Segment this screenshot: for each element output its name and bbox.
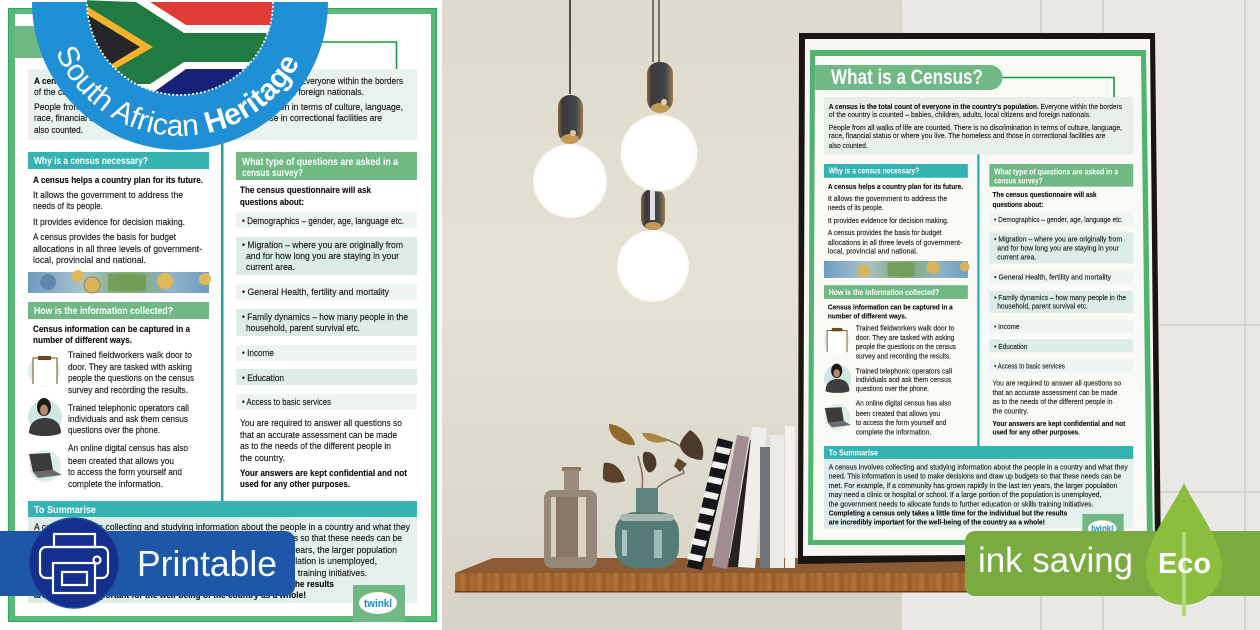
operators text: Trained telephonic operators call [68, 403, 189, 414]
why section: A census provides the basis for budget [33, 232, 176, 243]
questions intro: questions about: [240, 197, 304, 208]
why section: A census helps a country plan for its future. [828, 182, 963, 191]
intro panel: of the country is counted – babies, children, adults, local citizens and foreign nationals. [34, 87, 364, 98]
striped book [687, 438, 733, 570]
to summarise section: the government needs to allocate funds to further education or skills training initiatives. [34, 568, 367, 579]
to summarise section: To Summarise [34, 505, 96, 516]
icon: printer [40, 534, 108, 593]
banner bar [0, 531, 295, 596]
grey book [760, 447, 770, 568]
how section: number of different ways. [33, 335, 132, 346]
online text: been created that allows you [68, 456, 174, 467]
fieldworkers text: survey and recording the results. [68, 385, 188, 396]
South African Heritage badge [32, 0, 328, 150]
why section: allocations in all three levels of government- [828, 238, 963, 247]
why section: needs of its people. [828, 203, 884, 212]
why section [28, 152, 209, 266]
bullet list [989, 212, 1133, 372]
questions intro: questions about: [993, 200, 1043, 209]
questions heading [236, 152, 417, 180]
brown glass bottle [544, 467, 597, 568]
fieldworkers text: survey and recording the results. [856, 352, 951, 361]
wooden shelf [455, 558, 1000, 601]
questions heading: census survey? [242, 168, 303, 179]
intro panel: A census is the total count of everyone in the country's population. Everyone within the borders [34, 76, 403, 87]
bullet list: current area. [997, 252, 1036, 261]
to summarise section: To Summarise [829, 449, 878, 458]
fieldworkers text: people the questions on the census [856, 342, 956, 351]
to summarise section: met. For example, if a community has grown rapidly in the last ten years, the larger population [34, 545, 397, 556]
intro panel: race, financial status or where you live. The homeless and those in correctional facilities are [829, 131, 1105, 140]
red band [150, 2, 280, 25]
fieldworkers text: Trained fieldworkers walk door to [856, 323, 954, 332]
bullet list: • Migration – where you are originally from [994, 235, 1122, 244]
required answers text [992, 378, 1126, 437]
twinkl logo [1082, 514, 1124, 544]
to summarise section [824, 446, 1133, 528]
bullet list: • General Health, fertility and mortality [994, 273, 1111, 282]
eco text: Eco [1158, 548, 1211, 580]
bullet list: • Income [994, 322, 1020, 331]
questions heading: What type of questions are asked in a [242, 157, 398, 168]
framed poster on wall [798, 33, 1161, 564]
why section: It allows the government to address the [33, 190, 183, 201]
required answers text: You are required to answer all questions so [993, 378, 1121, 387]
white tiles [900, 0, 1260, 630]
title connector line [300, 42, 396, 69]
title text: What is a Census? [831, 65, 983, 89]
white mat [803, 39, 1155, 556]
money image band [28, 270, 211, 293]
intro panel: race, financial status or where you live. The homeless and those in correctional facilities are [34, 113, 382, 124]
column divider [977, 154, 979, 446]
column divider [221, 140, 224, 501]
bullet list: household, parent survival etc. [246, 323, 360, 334]
bullet list: household, parent survival etc. [997, 302, 1088, 311]
bullet list: • Access to basic services [242, 397, 331, 408]
fieldworkers text: door. They are tasked with asking [68, 362, 192, 373]
poster content [824, 97, 1133, 544]
twinkl logo: twinkl [1091, 524, 1113, 534]
how section: How is the information collected? [34, 306, 173, 317]
icon: telephone operator [28, 398, 62, 436]
why section: A census provides the basis for budget [828, 228, 942, 237]
twinkl logo: twinkl [364, 598, 392, 610]
wall [442, 0, 900, 630]
poster paper [813, 56, 1147, 540]
online text: complete the information. [68, 479, 163, 490]
fieldworkers text: door. They are tasked with asking [856, 333, 954, 342]
stack of books [687, 426, 795, 570]
operators text: questions over the phone. [68, 425, 160, 436]
pink book [712, 435, 749, 569]
green poster border [808, 50, 1153, 545]
badge text: South African Heritage [58, 46, 298, 136]
lamp 1 [533, 0, 607, 218]
ink saving text: ink saving [978, 541, 1133, 580]
icon: laptop [29, 450, 62, 482]
why section: It allows the government to address the [828, 194, 947, 203]
bullet list: • Family dynamics – how many people in the [242, 312, 408, 323]
required answers text: Your answers are kept confidential and not [993, 419, 1126, 428]
intro panel [28, 69, 417, 140]
intro panel: A census is the total count of everyone in the country's population. Everyone within the borders [829, 102, 1122, 111]
pendant lamps [533, 0, 698, 302]
gold chevron [87, 6, 153, 68]
questions intro: The census questionnaire will ask [240, 185, 372, 196]
green poster border [8, 8, 437, 622]
why section: It provides evidence for decision making. [828, 216, 949, 225]
room background [442, 0, 1260, 630]
icon: eco leaf [1146, 483, 1222, 616]
blue badge disc [32, 0, 328, 150]
to summarise section: the government needs to allocate funds to further education or skills training initiatives. [829, 500, 1093, 509]
bullet list: • Access to basic services [994, 361, 1065, 370]
required answers text: Your answers are kept confidential and not [240, 468, 408, 479]
to summarise section: Completing a census only takes a little time for the individual but the results [34, 579, 334, 590]
questions heading: census survey? [994, 176, 1043, 185]
fieldworkers text [856, 323, 956, 361]
questions intro: The census questionnaire will ask [993, 190, 1097, 199]
icon: clipboard [28, 355, 60, 387]
title tab [815, 65, 1002, 90]
why section: Why is a census necessary? [34, 156, 148, 167]
to summarise section: A census involves collecting and studying information about the people in a country and what they [829, 462, 1128, 471]
operators text [68, 403, 189, 436]
dried plant stems and leaves [603, 424, 703, 488]
bullet list [236, 212, 417, 410]
fieldworkers text [68, 350, 194, 396]
bullet list: and for how long you are staying in your [246, 251, 400, 262]
questions intro [992, 190, 1097, 209]
money image band [824, 261, 969, 278]
left poster [8, 8, 437, 622]
banner bar [965, 531, 1260, 596]
white book [738, 427, 767, 568]
questions heading [989, 164, 1133, 187]
online text: An online digital census has also [68, 443, 188, 454]
fieldworkers text: Trained fieldworkers walk door to [68, 350, 192, 361]
how section: Census information can be captured in a [828, 302, 953, 311]
title connector line [1000, 78, 1114, 98]
bullet list: • Family dynamics – how many people in the [994, 293, 1126, 302]
required answers text: used for any other purposes. [240, 479, 350, 490]
operators text [856, 366, 952, 393]
black frame [798, 33, 1161, 564]
black triangle [88, 15, 140, 64]
operators text: Trained telephonic operators call [856, 366, 952, 375]
lamp 2 [617, 0, 698, 302]
operators text: individuals and ask them census [68, 414, 188, 425]
bullet list: • Education [242, 373, 284, 384]
operators text: individuals and ask them census [856, 375, 951, 384]
ink saving Eco banner [965, 483, 1260, 616]
questions intro [240, 185, 372, 208]
operators text: questions over the phone. [856, 384, 929, 393]
blue band [154, 69, 244, 95]
to summarise section: may need a clinic or hospital or school. If a large portion of the population is unemployed, [829, 490, 1101, 499]
why section: local, provincial and national. [828, 247, 918, 256]
why section: A census helps a country plan for its future. [33, 175, 203, 186]
to summarise section: Completing a census only takes a little time for the individual but the results [829, 508, 1067, 518]
bullet list: • Income [242, 348, 274, 359]
online text: to access the form yourself and [856, 418, 946, 427]
online text: been created that allows you [856, 409, 940, 418]
to summarise section: are incredibly important for the well-being of the country as a whole! [34, 590, 306, 601]
icon: laptop [825, 404, 851, 430]
to summarise section: A census involves collecting and studying information about the people in a country and what they [34, 522, 410, 533]
bullet list: • General Health, fertility and mortality [242, 287, 389, 298]
teal glass vase [615, 488, 679, 568]
to summarise section: may need a clinic or hospital or school. If a large portion of the population is unemployed, [34, 556, 377, 567]
intro panel: also counted. [34, 125, 83, 136]
intro panel: of the country is counted – babies, children, adults, local citizens and foreign nationals. [829, 110, 1091, 119]
printer circle [29, 518, 119, 608]
to summarise section [28, 501, 417, 603]
title text: What is a Census? [52, 29, 265, 56]
to summarise section: need. This information is used to make decisions and draw up budgets so that these needs can be [34, 533, 402, 544]
required answers text: that an accurate assessment can be made [240, 430, 397, 441]
icon: South African flag [87, 0, 273, 95]
required answers text: as to the needs of the different people in [240, 441, 391, 452]
required answers text: the country. [240, 453, 285, 464]
how section [28, 302, 209, 346]
bullet list: current area. [246, 262, 295, 273]
background: white page behind left poster [0, 0, 442, 630]
twinkl logo [353, 585, 405, 622]
icon: clipboard [824, 327, 849, 353]
how section: number of different ways. [828, 311, 907, 320]
green Y band [80, 0, 280, 84]
why section: It provides evidence for decision making. [33, 217, 185, 228]
bullet list: • Demographics – gender, age, language etc. [242, 216, 404, 227]
intro panel: also counted. [829, 141, 868, 150]
bullet list: • Migration – where you are originally from [242, 240, 403, 251]
how section: How is the information collected? [829, 288, 939, 297]
why section: needs of its people. [33, 201, 103, 212]
poster paper [15, 14, 431, 616]
required answers text: used for any other purposes. [993, 428, 1080, 437]
title tab [15, 26, 265, 58]
online text: complete the information. [856, 428, 931, 437]
Printable banner [0, 518, 295, 608]
required answers text [240, 418, 408, 490]
to summarise section: met. For example, if a community has grown rapidly in the last ten years, the larger population [829, 481, 1117, 490]
printable text: Printable [137, 543, 277, 584]
intro panel: People from all walks of life are counted. There is no discrimination in terms of culture, language, [829, 123, 1122, 132]
intro panel [824, 97, 1133, 154]
dotted ring [87, 0, 273, 95]
required answers text: that an accurate assessment can be made [993, 388, 1117, 397]
how section: Census information can be captured in a [33, 324, 191, 335]
required answers text: the country. [993, 407, 1028, 416]
online text: An online digital census has also [856, 399, 951, 408]
online text [68, 443, 188, 490]
bullet list: • Education [994, 342, 1027, 351]
online text: to access the form yourself and [68, 467, 182, 478]
how section [824, 285, 968, 320]
why section: local, provincial and national. [33, 255, 146, 266]
to summarise section: are incredibly important for the well-being of the country as a whole! [829, 517, 1045, 526]
required answers text: as to the needs of the different people in [993, 397, 1113, 406]
questions heading: What type of questions are asked in a [994, 167, 1118, 177]
why section: Why is a census necessary? [829, 167, 919, 176]
required answers text: You are required to answer all questions so [240, 418, 402, 429]
bullet list: and for how long you are staying in your [997, 243, 1119, 252]
why section: allocations in all three levels of government- [33, 244, 202, 255]
icon: telephone operator [824, 364, 851, 393]
to summarise section: need. This information is used to make decisions and draw up budgets so that these needs can be [829, 471, 1121, 480]
why section [824, 164, 968, 256]
white book 2 [770, 435, 784, 568]
white book 3 [785, 426, 795, 568]
fieldworkers text: people the questions on the census [68, 373, 194, 384]
intro panel: People from all walks of life are counted. There is no discrimination in terms of culture, language, [34, 102, 403, 113]
online text [856, 399, 951, 437]
bullet list: • Demographics – gender, age, language etc. [994, 215, 1123, 224]
